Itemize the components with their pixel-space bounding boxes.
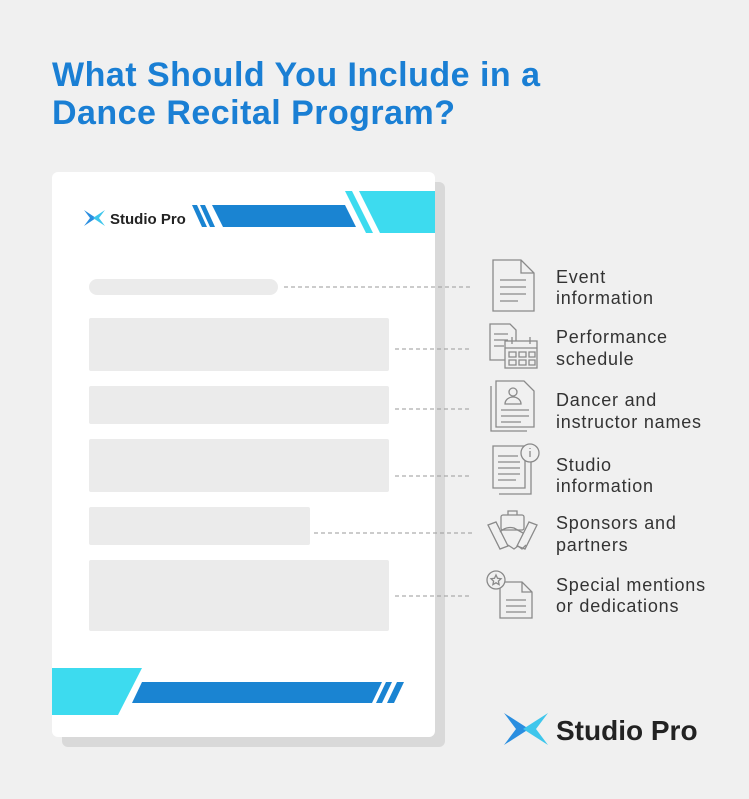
labels: Sponsors and <box>556 513 677 533</box>
labels: Performance <box>556 327 668 347</box>
labels: Dancer and <box>556 390 657 410</box>
icon: studio info <box>493 444 539 494</box>
icon: document <box>493 260 534 311</box>
brand logo <box>504 713 698 746</box>
brand logo: Studio Pro <box>556 715 698 746</box>
header banner <box>192 191 435 233</box>
title: Dance Recital Program? <box>52 94 455 132</box>
labels: Studio <box>556 455 612 475</box>
title: What Should You Include in a <box>52 56 541 94</box>
connector lines <box>284 287 472 596</box>
footer banner <box>52 668 404 715</box>
labels: information <box>556 288 654 308</box>
icons <box>487 260 539 618</box>
icon: schedule <box>490 324 537 368</box>
labels: Special mentions <box>556 575 706 595</box>
program card <box>52 172 445 747</box>
labels: instructor names <box>556 412 702 432</box>
labels: partners <box>556 535 628 555</box>
title <box>52 56 541 132</box>
labels: information <box>556 476 654 496</box>
icon: special mentions <box>487 571 532 618</box>
labels: Event <box>556 267 606 287</box>
icon: handshake <box>488 511 537 549</box>
icon: names <box>491 381 534 431</box>
placeholder rows <box>89 279 389 631</box>
labels <box>556 267 706 616</box>
card header logo: Studio Pro <box>110 211 186 228</box>
labels: or dedications <box>556 596 679 616</box>
labels: schedule <box>556 349 634 369</box>
